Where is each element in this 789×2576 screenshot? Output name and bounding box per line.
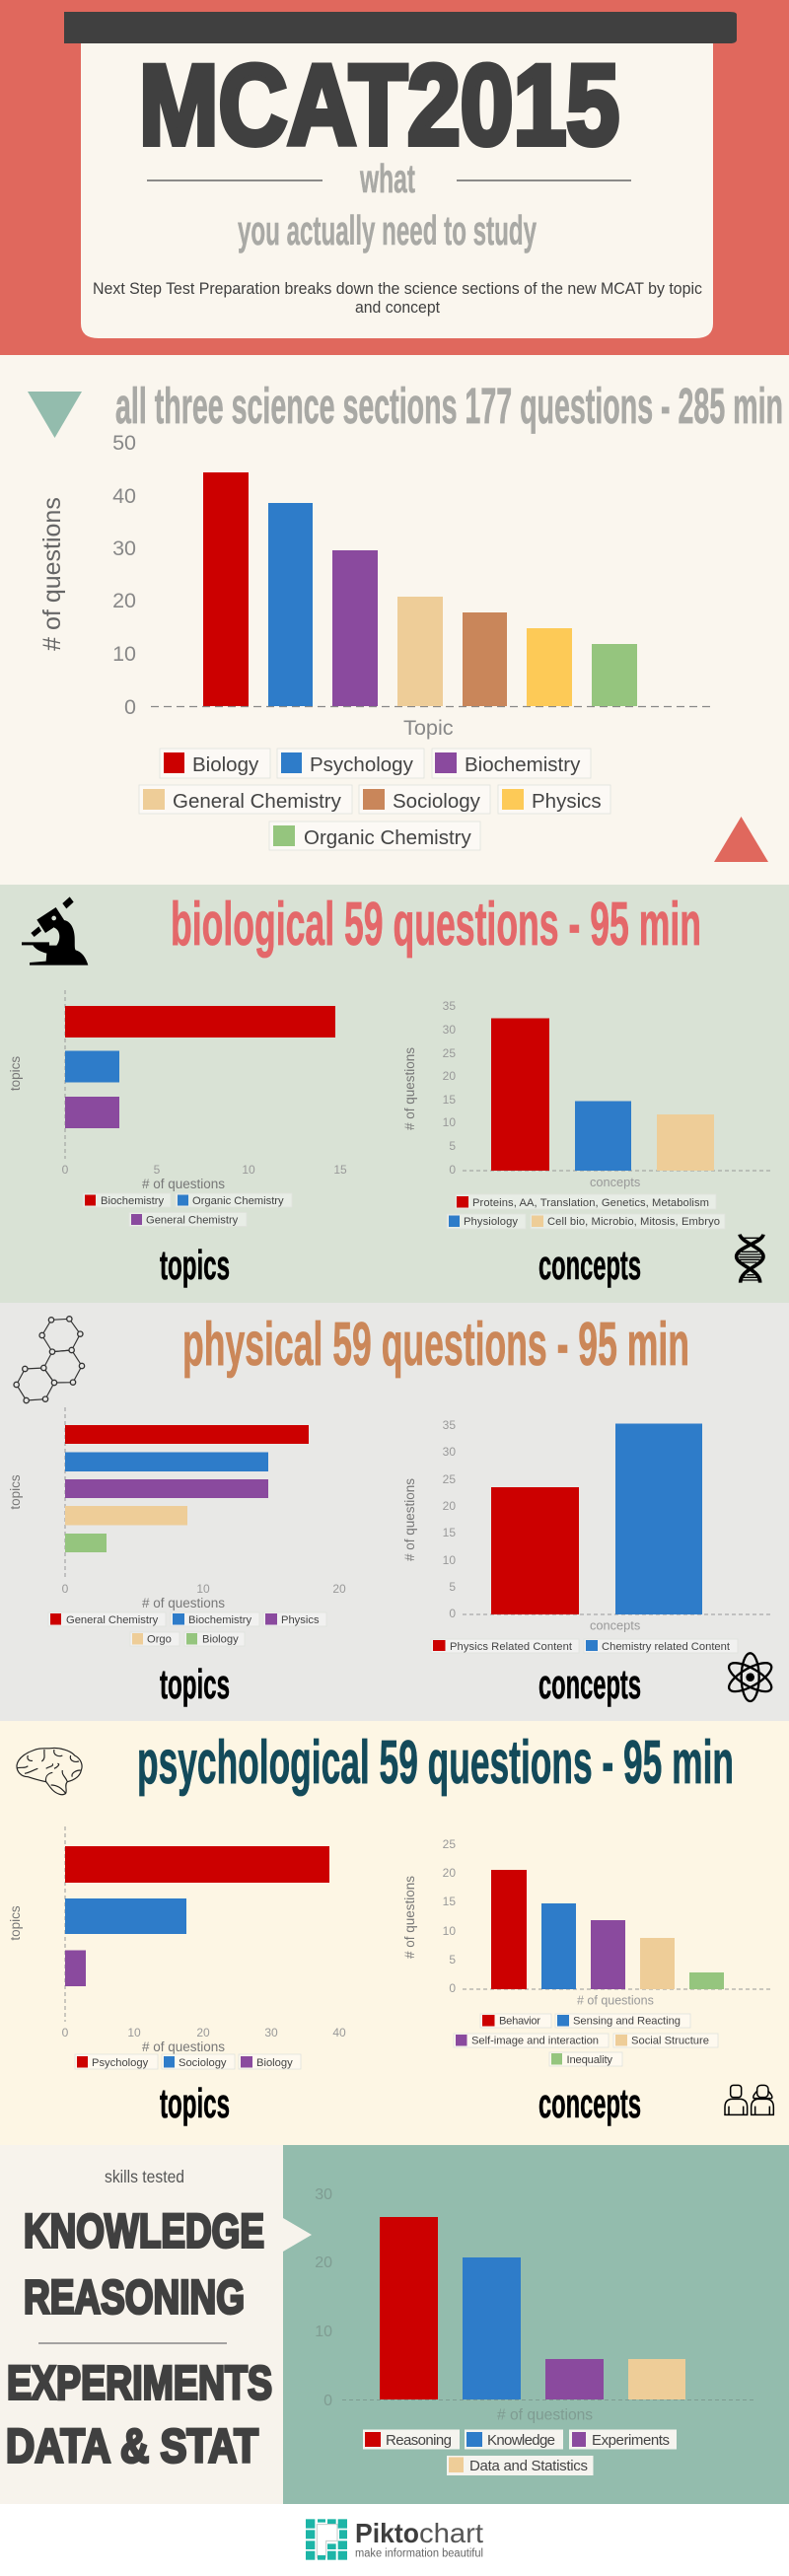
panel: physical xyxy=(0,1303,789,1721)
legend: physical topics: Physics xyxy=(281,1614,320,1626)
bar chart: psychological concepts: 25 xyxy=(443,1837,456,1851)
bar chart: physical concepts: 10 xyxy=(443,1553,456,1567)
bar chart: physical concepts: 35 xyxy=(443,1418,456,1432)
bar chart: psychological topics: 0 xyxy=(62,2026,69,2039)
icon: microscope xyxy=(22,896,88,966)
skill: knowledge: KNOWLEDGE xyxy=(24,2205,264,2258)
icon: atom xyxy=(725,1653,775,1701)
legend: biological concepts: Proteins, AA, Translation, Genetics, Metabolism xyxy=(472,1197,709,1209)
legend: psychological concepts: Behavior xyxy=(499,2016,540,2028)
bar chart: physical topics: # of questions xyxy=(142,1596,225,1610)
heading: topics: topics xyxy=(160,1242,230,1288)
legend: all sections: Biochemistry xyxy=(465,753,581,776)
bar chart: psychological concepts xyxy=(402,1837,770,2008)
bar chart: all sections: 20 xyxy=(112,589,136,612)
legend: psychological topics xyxy=(75,2054,301,2069)
panel: header xyxy=(0,0,789,355)
legend: biological concepts: Physiology xyxy=(464,1216,518,1228)
legend: physical topics: Orgo xyxy=(147,1633,172,1645)
legend: psychological concepts xyxy=(454,2014,718,2066)
bar chart: psychological concepts: 5 xyxy=(449,1953,456,1967)
bar chart: physical topics xyxy=(8,1407,346,1610)
bar chart: all sections xyxy=(38,431,713,740)
legend: psychological topics: Biology xyxy=(256,2057,293,2069)
icon: red triangle xyxy=(714,817,768,862)
skill: reasoning: REASONING xyxy=(24,2272,245,2324)
bar chart: psychological topics: 40 xyxy=(332,2026,346,2039)
bar chart: physical concepts: 25 xyxy=(443,1472,456,1486)
skill: data and stat: DATA & STAT xyxy=(6,2420,258,2473)
bar chart: physical concepts: 15 xyxy=(443,1526,456,1539)
bar chart: biological concepts: 15 xyxy=(443,1093,456,1107)
bar chart: biological topics: 5 xyxy=(154,1163,161,1177)
bar chart: biological topics: # of questions xyxy=(142,1177,225,1191)
intro text: Next Step Test Preparation breaks down the science sections of the new MCAT by topic xyxy=(93,280,702,298)
bar chart: psychological concepts: 15 xyxy=(443,1895,456,1908)
legend: all sections: Organic Chemistry xyxy=(304,826,471,849)
intro text xyxy=(93,280,702,317)
legend: skills xyxy=(363,2430,677,2475)
bar chart: physical concepts: 20 xyxy=(443,1499,456,1513)
panel: psychological xyxy=(0,1721,789,2145)
title: MCAT2015 xyxy=(139,42,619,169)
bar chart: all sections: 0 xyxy=(124,695,136,719)
bar chart: physical topics: 0 xyxy=(62,1582,69,1596)
bar chart: all sections: 40 xyxy=(112,484,136,508)
legend: psychological concepts: Inequality xyxy=(566,2054,612,2066)
bar chart: physical topics: 20 xyxy=(332,1582,346,1596)
pointer arrow xyxy=(283,2218,312,2252)
bar chart: physical topics: topics xyxy=(8,1474,23,1510)
bar chart: physical concepts: 30 xyxy=(443,1445,456,1459)
legend: biological concepts xyxy=(447,1194,725,1229)
footer: piktochart logo xyxy=(0,2504,789,2576)
bar chart: biological concepts: 35 xyxy=(443,999,456,1013)
bar chart: psychological concepts: 10 xyxy=(443,1924,456,1938)
bar chart: physical concepts xyxy=(402,1418,770,1633)
bar chart: biological topics: 0 xyxy=(62,1163,69,1177)
panel: biological xyxy=(0,885,789,1303)
bar chart: psychological concepts: # of questions xyxy=(402,1876,417,1959)
bar chart: psychological topics xyxy=(8,1826,346,2054)
icon: brain xyxy=(17,1748,82,1795)
bar chart: psychological topics: # of questions xyxy=(142,2039,225,2054)
icon: people xyxy=(725,2085,773,2114)
bar chart: biological topics: 10 xyxy=(242,1163,255,1177)
bar chart: psychological concepts: # of questions xyxy=(577,1994,654,2008)
skill: experiments: EXPERIMENTS xyxy=(7,2357,272,2410)
bar chart: biological concepts xyxy=(402,999,770,1189)
bar chart: biological concepts: 5 xyxy=(449,1139,456,1153)
bar chart: all sections: 10 xyxy=(112,642,136,666)
bar chart: skills: 10 xyxy=(315,2324,332,2340)
bar chart: biological topics xyxy=(8,990,347,1191)
heading: topics: topics xyxy=(160,1661,230,1707)
legend: physical concepts xyxy=(431,1639,738,1653)
legend: psychological concepts: Sensing and Reacting xyxy=(573,2016,681,2028)
legend: skills: Data and Statistics xyxy=(469,2458,588,2474)
legend: all sections: General Chemistry xyxy=(173,790,342,813)
legend: physical topics: General Chemistry xyxy=(66,1614,159,1626)
bar chart: biological topics: 15 xyxy=(333,1163,347,1177)
heading: topics: topics xyxy=(160,2080,230,2126)
bar chart: biological concepts: 30 xyxy=(443,1023,456,1037)
footer: piktochart logo: chart xyxy=(419,2518,483,2548)
label: skills tested: skills tested xyxy=(105,2167,184,2186)
legend: all sections xyxy=(139,749,610,850)
intro text: and concept xyxy=(355,299,440,317)
dark bar xyxy=(64,12,737,43)
bar chart: skills: 0 xyxy=(323,2393,332,2409)
card xyxy=(81,39,713,338)
legend: biological topics: Biochemistry xyxy=(101,1195,164,1207)
bar chart: biological concepts: # of questions xyxy=(402,1047,417,1130)
icon: dna xyxy=(737,1235,763,1283)
bar chart: biological concepts: 10 xyxy=(443,1115,456,1129)
bar chart: psychological topics: 30 xyxy=(264,2026,278,2039)
bar chart: skills: # of questions xyxy=(497,2406,593,2424)
heading: concepts: concepts xyxy=(538,1242,641,1288)
bar chart: biological concepts: concepts xyxy=(590,1175,640,1189)
subtitle: what: what xyxy=(359,156,415,201)
legend: physical concepts: Chemistry related Content xyxy=(602,1641,731,1653)
legend: biological topics: Organic Chemistry xyxy=(192,1195,284,1207)
bar chart: biological concepts: 25 xyxy=(443,1046,456,1060)
panel: skills tested xyxy=(0,2145,789,2504)
legend: biological topics xyxy=(83,1193,292,1227)
legend: psychological concepts: Self-image and interaction xyxy=(471,2036,599,2047)
logo wordmark: Pikto xyxy=(355,2518,419,2548)
legend: biological concepts: Cell bio, Microbio, Mitosis, Embryo xyxy=(547,1216,720,1228)
subtitle: you actually need to study: you actually need to study xyxy=(238,207,537,253)
heading: concepts: concepts xyxy=(538,1661,641,1707)
bar chart: psychological concepts: 0 xyxy=(449,1981,456,1995)
legend: skills: Experiments xyxy=(592,2432,670,2449)
legend: skills: Reasoning xyxy=(386,2432,452,2449)
icon: teal triangle xyxy=(28,392,82,438)
bar chart: psychological concepts: 20 xyxy=(443,1866,456,1880)
bar chart: psychological topics: 10 xyxy=(127,2026,141,2039)
legend: all sections: Physics xyxy=(532,790,602,813)
legend: physical concepts: Physics Related Content xyxy=(450,1641,573,1653)
bar chart: biological concepts: 0 xyxy=(449,1163,456,1177)
panel: all three science sections xyxy=(0,355,789,885)
bar chart: skills: 30 xyxy=(315,2186,332,2203)
bar chart: all sections: # of questions xyxy=(38,497,66,651)
legend: all sections: Sociology xyxy=(393,790,481,813)
bar chart: physical concepts: concepts xyxy=(590,1617,640,1633)
bar chart: psychological topics: 20 xyxy=(196,2026,210,2039)
bar chart: all sections: Topic xyxy=(403,715,454,740)
legend: physical topics: Biochemistry xyxy=(188,1614,251,1626)
bar chart: skills: 20 xyxy=(315,2254,332,2271)
bar chart: all sections: 30 xyxy=(112,537,136,560)
icon: molecule xyxy=(14,1317,85,1403)
legend: all sections: Biology xyxy=(192,753,259,776)
heading: concepts: concepts xyxy=(538,2080,641,2126)
bar chart: biological topics: topics xyxy=(8,1056,23,1091)
bar chart: skills xyxy=(315,2186,753,2424)
bar chart: physical concepts: 0 xyxy=(449,1607,456,1620)
legend: physical topics: Biology xyxy=(202,1633,239,1645)
icon: logo mark xyxy=(306,2519,347,2560)
bar chart: physical concepts: 5 xyxy=(449,1580,456,1594)
legend: biological topics: General Chemistry xyxy=(146,1215,239,1227)
bar chart: psychological topics: topics xyxy=(8,1905,23,1941)
bar chart: physical concepts: # of questions xyxy=(402,1478,417,1561)
legend: skills: Knowledge xyxy=(487,2432,555,2449)
bar chart: biological concepts: 20 xyxy=(443,1069,456,1083)
legend: physical topics xyxy=(48,1612,326,1646)
bar chart: physical topics: 10 xyxy=(196,1582,210,1596)
legend: psychological topics: Sociology xyxy=(179,2057,227,2069)
legend: psychological concepts: Social Structure xyxy=(631,2036,709,2047)
logo tagline: make information beautiful xyxy=(355,2548,483,2560)
legend: all sections: Psychology xyxy=(310,753,414,776)
bar chart: all sections: 50 xyxy=(112,431,136,455)
legend: psychological topics: Psychology xyxy=(92,2057,149,2069)
